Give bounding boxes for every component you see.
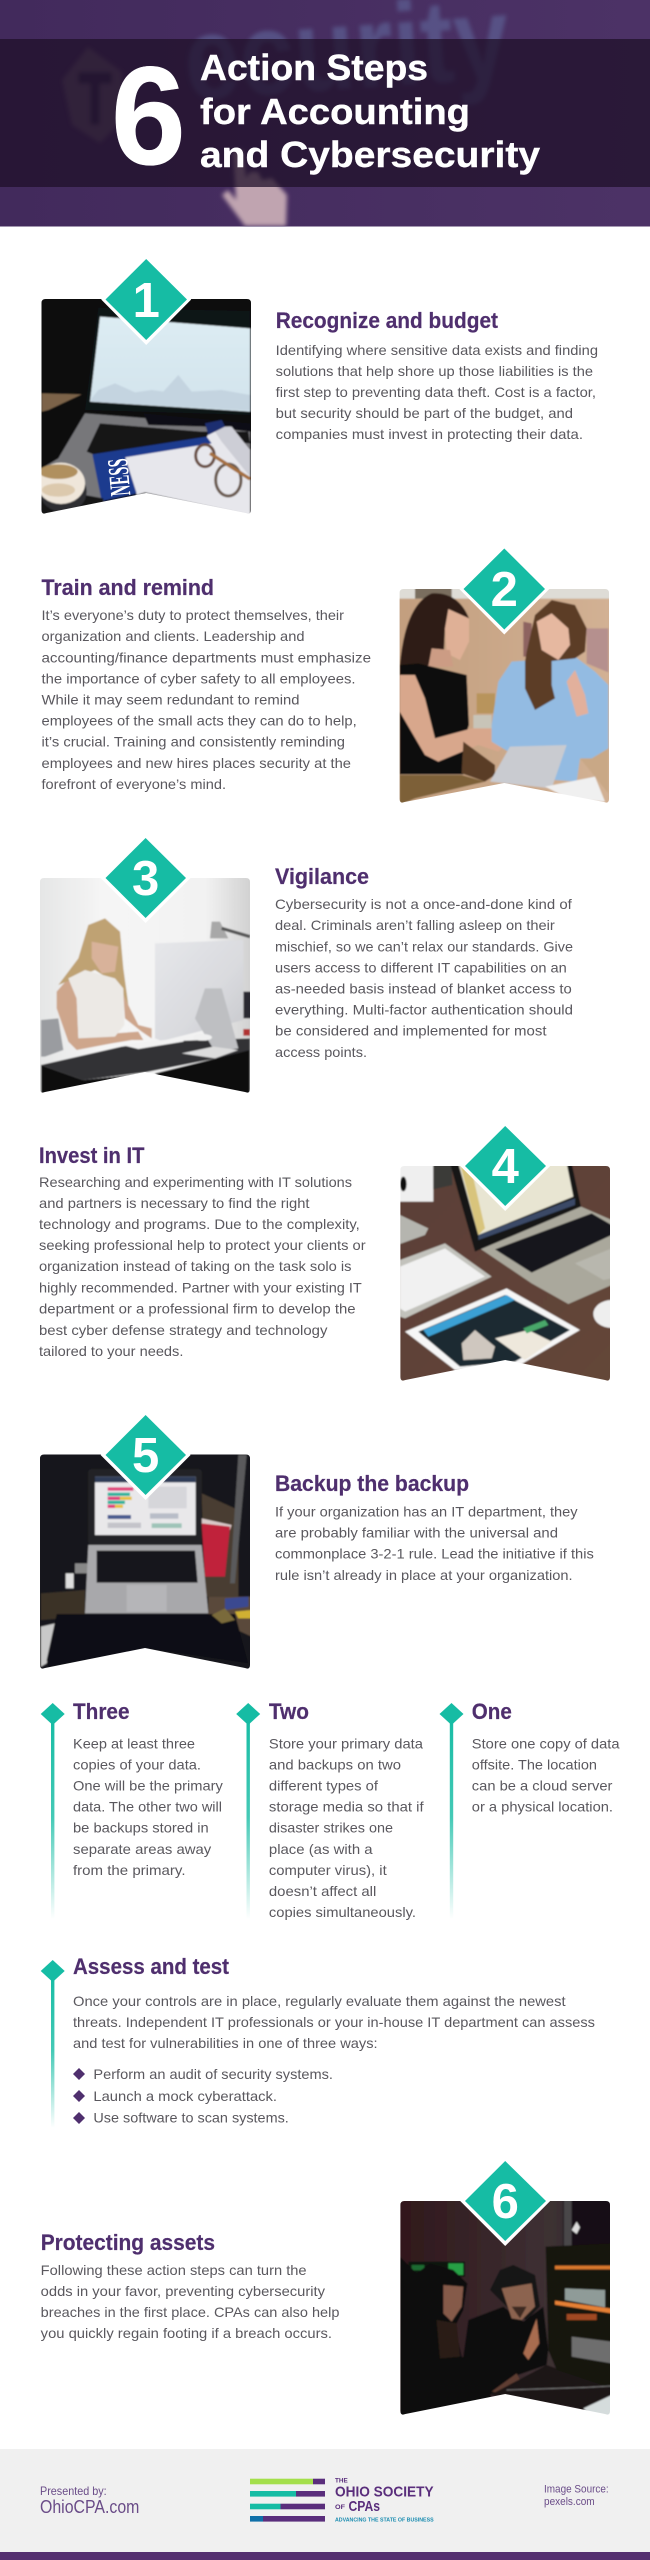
body text: are probably familiar with the universal and xyxy=(275,1525,558,1541)
logo: The Ohio Society of CPAs xyxy=(250,2479,434,2524)
heading: Train and remind xyxy=(42,575,214,600)
body text: organization instead of taking on the task solo is xyxy=(39,1258,352,1274)
body text: employees and new hires places security at the xyxy=(42,755,351,771)
badge: number 3 xyxy=(101,833,191,923)
panel: step 4 xyxy=(39,1121,630,1383)
dark title band xyxy=(0,39,650,187)
logo: The Ohio Society of CPAs: OF xyxy=(335,2505,345,2511)
body text xyxy=(275,896,573,1060)
body text: from the primary. xyxy=(73,1862,186,1878)
body text xyxy=(73,1735,223,1878)
heading: Protecting assets xyxy=(41,2230,215,2255)
title xyxy=(200,47,540,175)
body text: highly recommended. Partner with your existing IT xyxy=(39,1280,362,1296)
logo: The Ohio Society of CPAs: ADVANCING THE STATE OF BUSINESS xyxy=(335,2518,434,2524)
body text: One will be the primary xyxy=(73,1778,223,1794)
body text: or a physical location. xyxy=(472,1799,613,1815)
header banner xyxy=(0,0,650,226)
body text xyxy=(275,1504,594,1583)
heading: Vigilance xyxy=(275,864,369,889)
panel: step 3 xyxy=(37,833,573,1098)
body text: and partners is necessary to find the right xyxy=(39,1195,310,1211)
body text: Store one copy of data xyxy=(472,1735,620,1751)
body text: and test for vulnerabilities in one of three ways: xyxy=(73,2035,378,2051)
body text: Store your primary data xyxy=(269,1735,423,1751)
body text: deal. Criminals aren’t falling asleep on their xyxy=(275,917,555,933)
body text xyxy=(269,1735,424,1920)
photo: two people at a monitor xyxy=(397,2198,613,2420)
body text xyxy=(39,1174,366,1359)
bullet list: Launch a mock cyberattack. xyxy=(93,2088,277,2104)
image source: Image Source: xyxy=(544,2484,609,2496)
marker: diamond and fading line xyxy=(236,1703,260,1919)
footer xyxy=(0,2449,650,2552)
body text: mischief, so we can’t relax our standards. Give xyxy=(275,938,573,954)
body text: access points. xyxy=(275,1044,367,1060)
title: and Cybersecurity xyxy=(200,134,540,175)
presented by: OhioCPA.com xyxy=(40,2497,139,2517)
body text: Researching and experimenting with IT solutions xyxy=(39,1174,352,1190)
column: one xyxy=(440,1699,620,1919)
bullet list: Perform an audit of security systems. xyxy=(93,2066,333,2082)
body text: Once your controls are in place, regularly evaluate them against the newest xyxy=(73,1993,566,2009)
body text: seeking professional help to protect your clients or xyxy=(39,1237,366,1253)
column: two xyxy=(236,1699,424,1920)
body text: technology and programs. Due to the complexity, xyxy=(39,1216,360,1232)
body text xyxy=(41,2262,340,2341)
body text: you quickly regain footing if a breach occurs. xyxy=(41,2325,332,2341)
body text: disaster strikes one xyxy=(269,1820,393,1836)
body text: breaches in the first place. CPAs can also help xyxy=(41,2304,340,2320)
panel: step 5 xyxy=(37,1410,594,1673)
badge: number 2 xyxy=(459,544,549,634)
magazine cover text: NESS xyxy=(102,457,137,497)
body text: odds in your favor, preventing cybersecurity xyxy=(41,2283,325,2299)
big numeral 6: 6 xyxy=(111,39,186,195)
body text: organization and clients. Leadership and xyxy=(42,628,304,644)
body text: Cybersecurity is not a once-and-done kind of xyxy=(275,896,572,912)
body text: data. The other two will xyxy=(73,1799,222,1815)
body text: but security should be part of the budget, and xyxy=(276,405,573,421)
heading: Two xyxy=(269,1699,309,1724)
panel: step 6 xyxy=(41,2156,613,2420)
body text: forefront of everyone’s mind. xyxy=(42,776,226,792)
body text: be considered and implemented for most xyxy=(275,1023,547,1039)
body text: While it may seem redundant to remind xyxy=(42,692,300,708)
heading: Recognize and budget xyxy=(276,308,499,333)
body text: first step to preventing data theft. Cost is a factor, xyxy=(276,384,596,400)
photo: laptop and magazine xyxy=(37,297,255,518)
panel: assess and test xyxy=(41,1954,595,2128)
body text: Keep at least three xyxy=(73,1735,195,1751)
body text: separate areas away xyxy=(73,1841,211,1857)
body text: doesn’t affect all xyxy=(269,1883,376,1899)
badge: number 6 xyxy=(460,2156,550,2246)
badge: number 4: 4 xyxy=(492,1140,519,1194)
title: for Accounting xyxy=(200,91,470,132)
body text: it’s crucial. Training and consistently reminding xyxy=(42,734,345,750)
column: three xyxy=(41,1699,223,1919)
body text: copies of your data. xyxy=(73,1756,201,1772)
badge: number 4 xyxy=(460,1121,550,1211)
heading: One xyxy=(472,1699,512,1724)
heading: Backup the backup xyxy=(275,1471,469,1496)
badge: number 2: 2 xyxy=(491,563,518,617)
body text: rule isn’t already in place at your organization. xyxy=(275,1567,573,1583)
body text: department or a professional firm to develop the xyxy=(39,1301,356,1317)
body text: offsite. The location xyxy=(472,1756,597,1772)
bottom bar xyxy=(0,2552,650,2560)
panel: step 1 xyxy=(37,254,598,518)
badge: number 1 xyxy=(101,254,191,345)
body text xyxy=(42,607,371,792)
body text: It’s everyone’s duty to protect themselves, their xyxy=(42,607,344,623)
body text: tailored to your needs. xyxy=(39,1343,183,1359)
image source xyxy=(544,2484,609,2508)
body text: accounting/finance departments must emphasize xyxy=(42,650,371,666)
body text: copies simultaneously. xyxy=(269,1904,416,1920)
marker: diamond and fading line xyxy=(41,1960,65,2128)
body text: best cyber defense strategy and technology xyxy=(39,1322,327,1338)
panel: step 2 xyxy=(42,544,613,808)
logo: The Ohio Society of CPAs: OHIO SOCIETY xyxy=(335,2484,434,2501)
photo: laptop with dashboard on a cluttered desk xyxy=(37,1452,253,1673)
marker: diamond and fading line xyxy=(440,1703,464,1919)
marker: diamond and fading line xyxy=(41,1703,65,1919)
heading: Three xyxy=(73,1699,130,1724)
body text: storage media so that if xyxy=(269,1799,424,1815)
body text xyxy=(472,1735,620,1815)
body text: different types of xyxy=(269,1778,378,1794)
body text: solutions that help shore up those liabilities is the xyxy=(276,363,593,379)
body text: commonplace 3-2-1 rule. Lead the initiative if this xyxy=(275,1546,594,1562)
heading: Assess and test xyxy=(73,1954,230,1979)
background photo: blurred security screen xyxy=(62,0,513,226)
badge: number 1: 1 xyxy=(133,274,160,328)
photo: woman at computer xyxy=(37,877,253,1098)
body text: as-needed basis instead of blanket access to xyxy=(275,980,572,996)
body text: be backups stored in xyxy=(73,1820,209,1836)
body text xyxy=(276,342,598,442)
body text: companies must invest in protecting their data. xyxy=(276,426,583,442)
body text: everything. Multi-factor authentication should xyxy=(275,1002,573,1018)
bullet list: Use software to scan systems. xyxy=(93,2110,289,2126)
body text: users access to different IT capabilities on an xyxy=(275,960,567,976)
photo: laptop, tablet and keyboard on desk xyxy=(400,1166,610,1381)
body text: employees of the small acts they can do to help, xyxy=(42,712,357,728)
body text: Following these action steps can turn the xyxy=(41,2262,307,2278)
presented by: Presented by: xyxy=(40,2484,107,2498)
badge: number 5 xyxy=(101,1410,191,1500)
title: Action Steps xyxy=(200,47,428,88)
heading: Invest in IT xyxy=(39,1143,145,1168)
image source: pexels.com xyxy=(544,2496,595,2508)
badge: number 3: 3 xyxy=(132,852,159,906)
body text: can be a cloud server xyxy=(472,1778,613,1794)
badge: number 6: 6 xyxy=(492,2175,519,2229)
body text: Identifying where sensitive data exists and finding xyxy=(276,342,598,358)
presented by xyxy=(40,2484,139,2517)
logo: The Ohio Society of CPAs: CPAs xyxy=(348,2498,380,2515)
badge: number 5: 5 xyxy=(132,1429,159,1483)
body text: computer virus), it xyxy=(269,1862,387,1878)
bullet list xyxy=(73,2066,333,2126)
body text xyxy=(73,1993,595,2051)
body text: place (as with a xyxy=(269,1841,373,1857)
body text: If your organization has an IT department, they xyxy=(275,1504,578,1520)
body text: threats. Independent IT professionals or your in-house IT department can assess xyxy=(73,2014,595,2030)
body text: the importance of cyber safety to all employees. xyxy=(42,670,356,686)
body text: and backups on two xyxy=(269,1756,401,1772)
logo: The Ohio Society of CPAs: THE xyxy=(335,2479,348,2485)
photo: two colleagues talking xyxy=(397,587,613,808)
